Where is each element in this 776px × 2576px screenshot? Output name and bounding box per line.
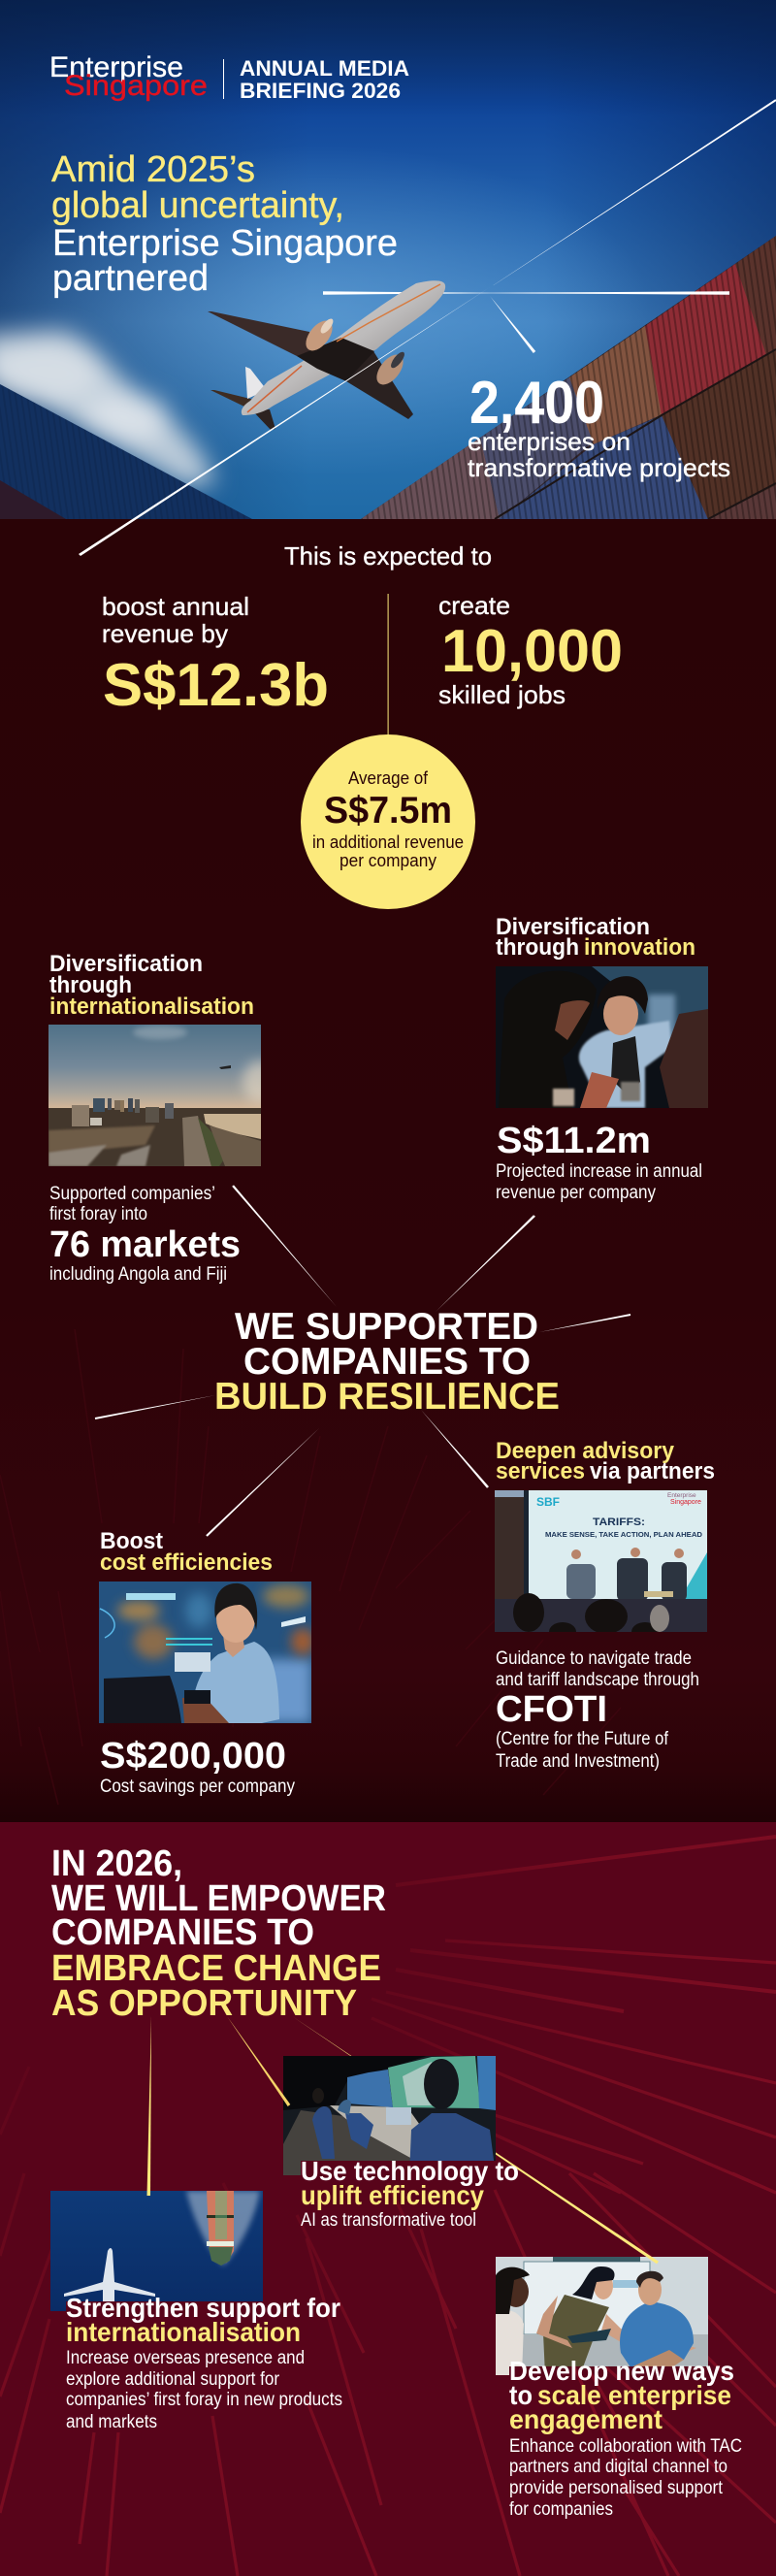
callout circle: average S$7.5m: Average of [348, 767, 429, 788]
stat: boost annual revenue: S$12.3b [103, 652, 329, 719]
heading: innovation [584, 934, 695, 961]
heading: Deepen advisory [496, 1438, 675, 1464]
heading: in 2026 we will empower: COMPANIES TO [51, 1912, 314, 1953]
block: strengthen support: Increase overseas presence and [66, 2348, 305, 2368]
heading: in 2026 we will empower: EMBRACE CHANGE [51, 1948, 381, 1989]
heading: in 2026 we will empower: IN 2026, [51, 1843, 182, 1884]
block: strengthen support [66, 2293, 342, 2432]
heading: via partners [590, 1458, 715, 1484]
photo: woman with phone [99, 1581, 314, 1723]
header: annual media briefing: BRIEFING 2026 [240, 79, 401, 103]
body text and stat [49, 1184, 241, 1285]
stat: boost annual revenue: revenue by [102, 619, 228, 648]
block: develop new ways: scale enterprise [537, 2380, 731, 2410]
heading: cost efficiencies [100, 1549, 273, 1576]
stat and body [496, 1121, 702, 1203]
block: use technology: AI as transformative tool [301, 2210, 476, 2231]
block: develop new ways: engagement [509, 2404, 663, 2434]
block: use technology: uplift efficiency [301, 2180, 484, 2210]
hero title: partnered [52, 258, 209, 299]
stat and body: revenue per company [496, 1183, 656, 1203]
body text and stat: first foray into [49, 1204, 147, 1224]
block: strengthen support: companies’ first foray in new products [66, 2390, 342, 2410]
heading: Diversification [49, 951, 203, 977]
hero converging lines [79, 99, 776, 556]
photo: coastal city [48, 1025, 277, 1166]
stat: create 10,000 jobs [438, 591, 623, 709]
callout circle: average S$7.5m: S$7.5m [324, 790, 452, 831]
hero title: Amid 2025’s [51, 149, 255, 190]
photo: tariffs panel discussion: MAKE SENSE, TAKE ACTION, PLAN AHEAD [545, 1532, 702, 1539]
block: develop new ways: provide personalised support [509, 2478, 724, 2498]
stat and body: S$200,000 [100, 1736, 286, 1777]
heading: through [49, 972, 132, 998]
heading: we supported companies to build resilience [214, 1306, 560, 1418]
connector: empower to internationalisation [147, 2016, 151, 2196]
body text and stat: 76 markets [49, 1224, 241, 1265]
block: develop new ways: to [509, 2380, 533, 2410]
logo: Enterprise Singapore: Singapore [64, 70, 208, 102]
heading [496, 914, 695, 961]
stat and body: Projected increase in annual [496, 1161, 702, 1182]
body text: Trade and Investment) [496, 1751, 660, 1772]
stat: create 10,000 jobs: create [438, 591, 510, 620]
stat: create 10,000 jobs: skilled jobs [438, 680, 566, 709]
header: annual media briefing: ANNUAL MEDIA [240, 56, 409, 81]
photo: tariffs panel discussion: Enterprise [667, 1492, 696, 1499]
photo: tariffs panel discussion [495, 1490, 707, 1642]
cloud [0, 330, 215, 485]
block: develop new ways: Develop new ways [509, 2356, 734, 2386]
logo: Enterprise Singapore: Enterprise [49, 51, 183, 83]
stat: 2,400 enterprises: enterprises on [468, 427, 630, 456]
photo: tariffs panel discussion: SBF [536, 1495, 560, 1509]
photo: tariffs panel discussion: TARIFFS: [593, 1516, 645, 1528]
block: strengthen support: and markets [66, 2412, 157, 2432]
stat: create 10,000 jobs: 10,000 [441, 618, 623, 685]
heading: in 2026 we will empower: WE WILL EMPOWER [51, 1878, 386, 1919]
heading: in 2026 we will empower: AS OPPORTUNITY [51, 1983, 357, 2024]
block: strengthen support: explore additional support for [66, 2369, 280, 2390]
block: diversification through innovation [496, 914, 708, 1203]
stat: 2,400 enterprises: 2,400 [469, 370, 604, 437]
text: this is expected to: This is expected to [284, 541, 492, 571]
callout circle: average S$7.5m [301, 734, 475, 909]
header: annual media briefing [240, 56, 409, 103]
block: strengthen support: internationalisation [66, 2317, 301, 2347]
heading [49, 951, 254, 1020]
photo: business team at whiteboard [496, 2257, 708, 2375]
stat: boost annual revenue: boost annual [102, 592, 249, 621]
body text [496, 1648, 699, 1772]
block: develop new ways: partners and digital channel to [509, 2457, 728, 2477]
connector lines: build resilience [95, 1185, 630, 1537]
stat and body: S$11.2m [497, 1121, 651, 1161]
heading: through [496, 934, 579, 961]
callout circle: average S$7.5m: in additional revenue [312, 831, 464, 852]
block: develop new ways [509, 2356, 742, 2520]
block: develop new ways: for companies [509, 2499, 613, 2520]
heading: we supported companies to build resilience: WE SUPPORTED [235, 1306, 538, 1348]
heading: in 2026 we will empower [51, 1843, 386, 2024]
hero title: global uncertainty, [51, 185, 344, 226]
body text: CFOTI [496, 1689, 607, 1730]
heading [100, 1528, 273, 1576]
hero title: Enterprise Singapore [52, 223, 398, 264]
block: boost cost efficiencies [99, 1528, 314, 1797]
block: strengthen support: Strengthen support for [66, 2293, 340, 2323]
body text and stat: including Angola and Fiji [49, 1264, 227, 1285]
body text: Guidance to navigate trade [496, 1648, 692, 1669]
right container stack [361, 236, 776, 519]
person center [543, 2295, 609, 2366]
connector: empower to technology [227, 2016, 290, 2106]
photo: innovation team [496, 966, 708, 1108]
logo: Enterprise Singapore [49, 51, 208, 102]
callout circle: average S$7.5m: per company [340, 850, 437, 870]
block: deepen advisory services [495, 1438, 715, 1772]
block: diversification through internationalisation [48, 951, 277, 1285]
stat: 2,400 enterprises: transformative projects [468, 453, 730, 482]
body text: and tariff landscape through [496, 1670, 699, 1690]
person left [496, 2310, 524, 2375]
hero horizontal line [323, 291, 729, 295]
block: use technology: Use technology to [301, 2156, 519, 2186]
block: use technology [301, 2156, 519, 2231]
body text: (Centre for the Future of [496, 1729, 669, 1749]
heading: we supported companies to build resilience: BUILD RESILIENCE [214, 1376, 560, 1418]
stat and body [100, 1736, 295, 1797]
stat: boost annual revenue [102, 592, 329, 719]
person right [620, 2301, 694, 2367]
photo: plane and container ship [50, 2191, 263, 2311]
stat: 2,400 enterprises [468, 370, 730, 482]
heading: internationalisation [49, 994, 254, 1020]
hero title [51, 149, 398, 299]
stat and body: Cost savings per company [100, 1777, 295, 1797]
connector: empower to people photo [292, 2016, 659, 2264]
body text and stat: Supported companies’ [49, 1184, 215, 1204]
panel: hero photo [0, 0, 776, 519]
heading: services [496, 1458, 585, 1484]
photo: operations control room [283, 2056, 496, 2175]
heading: Boost [100, 1528, 163, 1554]
photo: tariffs panel discussion: Singapore [670, 1499, 701, 1506]
heading: we supported companies to build resilience: COMPANIES TO [243, 1341, 531, 1383]
heading [496, 1438, 715, 1484]
heading: Diversification [496, 914, 650, 940]
left container stack [0, 384, 252, 519]
block: develop new ways: Enhance collaboration with TAC [509, 2436, 742, 2457]
airplane [208, 280, 445, 430]
